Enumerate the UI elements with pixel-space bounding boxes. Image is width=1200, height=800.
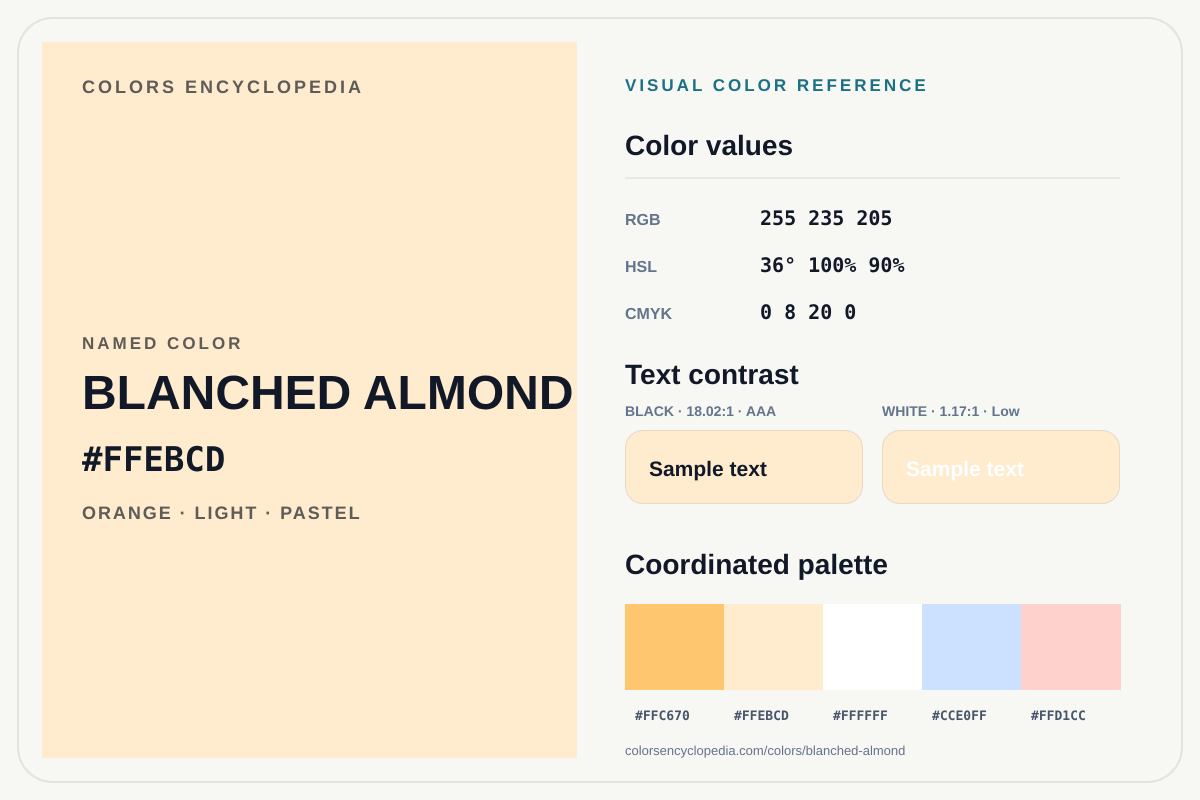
contrast label: white: WHITE · 1.17:1 · Low (882, 403, 1020, 419)
color name: BLANCHED ALMOND (82, 367, 574, 420)
sample text white: Sample text (906, 458, 1024, 481)
color tags: ORANGE · LIGHT · PASTEL (82, 503, 362, 523)
brand label: COLORS ENCYCLOPEDIA (82, 77, 364, 97)
swatch label FFFFFF: #FFFFFF (833, 709, 888, 724)
swatch FFD1CC (1021, 604, 1121, 690)
swatch FFC670 (625, 604, 724, 690)
panel: color swatch (42, 42, 577, 758)
color values: HSL value: 36° 100% 90% (760, 253, 904, 277)
heading: coordinated palette: Coordinated palette (625, 549, 888, 580)
source url: colorsencyclopedia.com/colors/blanched-almond (625, 743, 905, 758)
swatch FFFFFF (823, 604, 922, 690)
swatch FFEBCD (724, 604, 823, 690)
color values: HSL label: HSL (625, 259, 657, 276)
swatch CCE0FF (922, 604, 1021, 690)
swatch label CCE0FF: #CCE0FF (932, 709, 987, 724)
heading: color values: Color values (625, 130, 793, 161)
named color label: NAMED COLOR (82, 334, 243, 353)
swatch label FFEBCD: #FFEBCD (734, 709, 789, 724)
color values: RGB label: RGB (625, 212, 661, 229)
heading: text contrast: Text contrast (625, 359, 799, 390)
section eyebrow: VISUAL COLOR REFERENCE (625, 76, 929, 95)
contrast sample: white text (882, 430, 1120, 504)
swatch label FFD1CC: #FFD1CC (1031, 709, 1086, 724)
color values: CMYK value: 0 8 20 0 (760, 300, 856, 324)
palette swatches (625, 604, 1121, 690)
contrast sample: black text (625, 430, 863, 504)
color values: CMYK label: CMYK (625, 306, 672, 323)
sample text black: Sample text (649, 458, 767, 481)
color values: RGB value: 255 235 205 (760, 206, 892, 230)
hex code: #FFEBCD (82, 440, 225, 480)
contrast label: black: BLACK · 18.02:1 · AAA (625, 403, 776, 419)
swatch label FFC670: #FFC670 (635, 709, 690, 724)
